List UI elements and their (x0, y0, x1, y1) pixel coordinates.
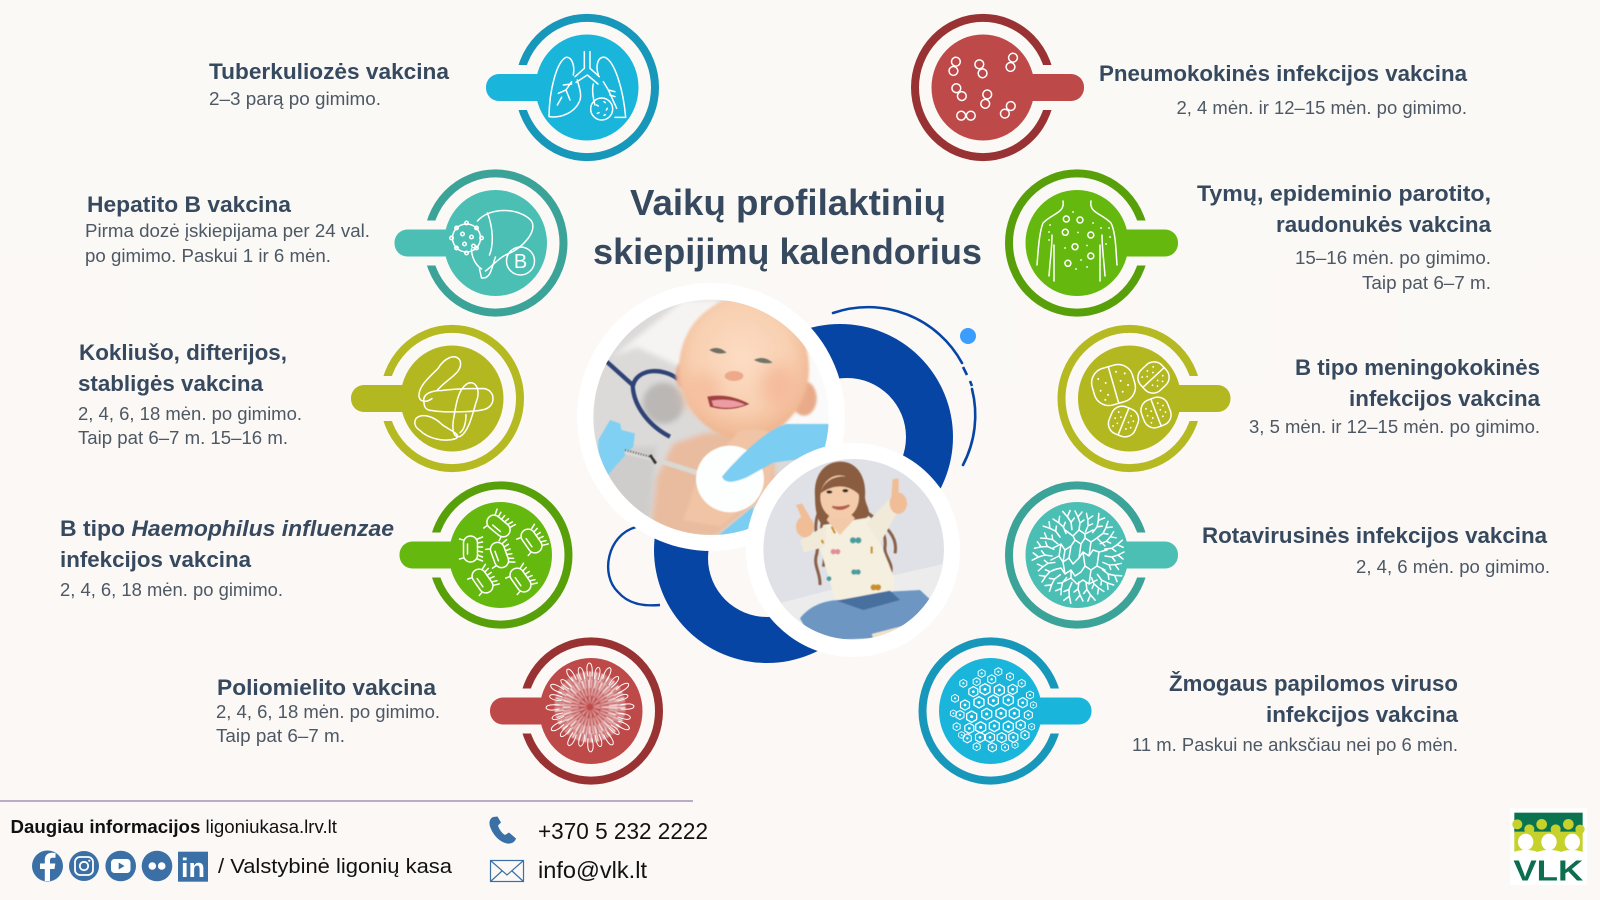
text: more information: Daugiau informacijos ligoniukasa.lrv.lt (10, 817, 337, 837)
heading: infekcijos vakcina (60, 547, 251, 572)
badge: Hib (400, 485, 568, 625)
panel: Tuberkuliozės vakcina (209, 18, 655, 157)
icon: liver with virus (450, 210, 534, 278)
logo: VLK: VLK (1513, 856, 1584, 888)
photo: baby receiving vaccine (577, 283, 845, 551)
heading: Poliomielito vakcina (217, 675, 436, 700)
heading: Hepatito B vakcina (87, 192, 291, 217)
schedule: 2, 4, 6, 18 mėn. po gimimo. (216, 702, 440, 722)
panel: Hepatito B vakcina (85, 173, 564, 313)
heading (60, 516, 394, 572)
heading (78, 340, 287, 396)
title (593, 182, 982, 272)
badge: hepatitis B (394, 173, 564, 313)
schedule: 15–16 mėn. po gimimo. (1295, 248, 1491, 268)
badge: polio (490, 641, 659, 781)
icon: torso with rash (1037, 201, 1117, 281)
schedule: 2, 4, 6, 18 mėn. po gimimo. (78, 404, 302, 424)
badge: tuberculosis (486, 18, 655, 157)
schedule: Taip pat 6–7 m. (216, 726, 345, 746)
icon: ciliated bacteria (460, 508, 549, 598)
badge: DTP (351, 329, 520, 468)
icon: bacilli (415, 357, 493, 440)
badge: meningococcus B (1062, 329, 1230, 468)
icon: lungs (549, 52, 626, 120)
heading: B tipo meningokokinės (1295, 355, 1540, 380)
logo: VLK (1510, 808, 1587, 888)
schedule (216, 702, 440, 746)
heading: Žmogaus papilomos viruso (1169, 671, 1458, 696)
title: Vaikų profilaktinių (630, 182, 946, 223)
title: skiepijimų kalendorius (593, 231, 982, 272)
panel: B tipo Haemophilus influenzae infekcijos vakcina (60, 485, 568, 625)
panel: Tymų, epideminio parotito, raudonukės vakcina (1009, 173, 1491, 313)
icon: envelope (490, 860, 524, 882)
schedule: Taip pat 6–7 m. (1362, 273, 1491, 293)
heading (1169, 671, 1458, 727)
heading: stabligės vakcina (78, 371, 263, 396)
panel: Pneumokokinės infekcijos vakcina (915, 18, 1467, 157)
heading (1197, 181, 1491, 237)
panel: B tipo meningokokinės infekcijos vakcina (1062, 329, 1540, 468)
icon: meningococci (1088, 357, 1174, 440)
badge: hepatitis B: B (514, 251, 527, 273)
schedule: 2, 4 mėn. ir 12–15 mėn. po gimimo. (1176, 98, 1467, 118)
heading: Rotavirusinės infekcijos vakcina (1202, 523, 1547, 548)
schedule: po gimimo. Paskui 1 ir 6 mėn. (85, 246, 331, 266)
text: email: info@vlk.lt (538, 857, 648, 883)
icon: YouTube (105, 851, 136, 881)
badge: HPV (922, 641, 1092, 781)
panel: Rotavirusinės infekcijos vakcina (1009, 485, 1550, 625)
heading: Kokliušo, difterijos, (79, 340, 287, 365)
heading: Pneumokokinės infekcijos vakcina (1099, 61, 1467, 86)
icon: polio virus (546, 663, 634, 752)
schedule: 2, 4, 6 mėn. po gimimo. (1356, 557, 1550, 577)
badge: rotavirus (1009, 485, 1178, 625)
schedule: 11 m. Paskui ne anksčiau nei po 6 mėn. (1132, 735, 1458, 755)
heading: Tuberkuliozės vakcina (209, 59, 449, 84)
schedule (1295, 248, 1491, 293)
icon: LinkedIn: in (181, 853, 205, 883)
panel: footer contact information (0, 801, 708, 883)
icon: Instagram (69, 851, 99, 881)
heading: raudonukės vakcina (1276, 212, 1491, 237)
badge: MMR (1009, 173, 1178, 313)
photo: smiling girl with thumbs up (746, 443, 960, 657)
heading: infekcijos vakcina (1266, 702, 1458, 727)
icon: rotavirus (1032, 509, 1125, 603)
schedule: 2, 4, 6, 18 mėn. po gimimo. (60, 580, 283, 600)
heading: B tipo Haemophilus influenzae (60, 516, 394, 541)
icon: diplococci (948, 52, 1018, 120)
icon: Flickr (142, 851, 172, 881)
panel: Žmogaus papilomos viruso infekcijos vakcina (922, 641, 1458, 781)
heading (1295, 355, 1540, 411)
icon: phone (489, 816, 516, 844)
icon: papilloma virus (950, 668, 1036, 752)
panel: Kokliušo, difterijos, stabligės vakcina (78, 329, 520, 468)
badge: pneumococcus (915, 18, 1084, 157)
heading: infekcijos vakcina (1349, 386, 1540, 411)
schedule: Pirma dozė įskiepijama per 24 val. (85, 221, 370, 241)
icon: Facebook (32, 850, 63, 882)
text: phone number: +370 5 232 2222 (538, 818, 708, 844)
panel: Poliomielito vakcina (216, 641, 659, 781)
schedule (85, 221, 370, 266)
schedule: 3, 5 mėn. ir 12–15 mėn. po gimimo. (1249, 417, 1540, 437)
panel: decorative blue rings behind photos (608, 307, 976, 663)
schedule (78, 404, 302, 448)
heading: Tymų, epideminio parotito, (1197, 181, 1491, 206)
text: organisation: / Valstybinė ligonių kasa (218, 855, 453, 878)
schedule: Taip pat 6–7 m. 15–16 m. (78, 428, 288, 448)
schedule: 2–3 parą po gimimo. (209, 89, 381, 109)
